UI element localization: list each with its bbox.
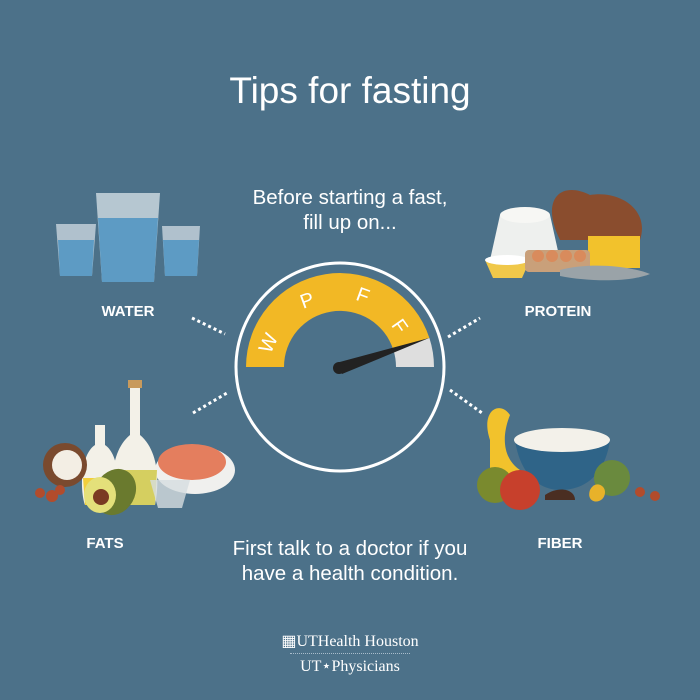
icon: water glasses [56, 193, 200, 282]
icon: protein foods [485, 190, 650, 280]
dotted connectors [192, 318, 482, 413]
intro text: fill up on... [303, 211, 397, 234]
logo: UT⋆Physicians [300, 658, 400, 675]
logo [281, 633, 419, 675]
title: Tips for fasting [229, 70, 471, 111]
label: fiber: FIBER [538, 535, 582, 552]
icon: fats foods [35, 380, 235, 523]
gauge [236, 263, 444, 471]
label: fats: FATS [86, 535, 124, 552]
gauge: F [353, 284, 372, 308]
gauge: F [387, 315, 412, 338]
intro text: Before starting a fast, [253, 186, 447, 209]
label: protein: PROTEIN [525, 303, 591, 320]
gauge: P [297, 288, 317, 314]
footer text: First talk to a doctor if you [233, 537, 467, 560]
intro text [253, 186, 447, 234]
label: water: WATER [101, 303, 155, 320]
logo: ▦UTHealth Houston [281, 633, 419, 650]
footer text [233, 537, 467, 585]
gauge: W [255, 330, 283, 357]
icon: fiber foods [477, 408, 660, 510]
footer text: have a health condition. [242, 562, 458, 585]
